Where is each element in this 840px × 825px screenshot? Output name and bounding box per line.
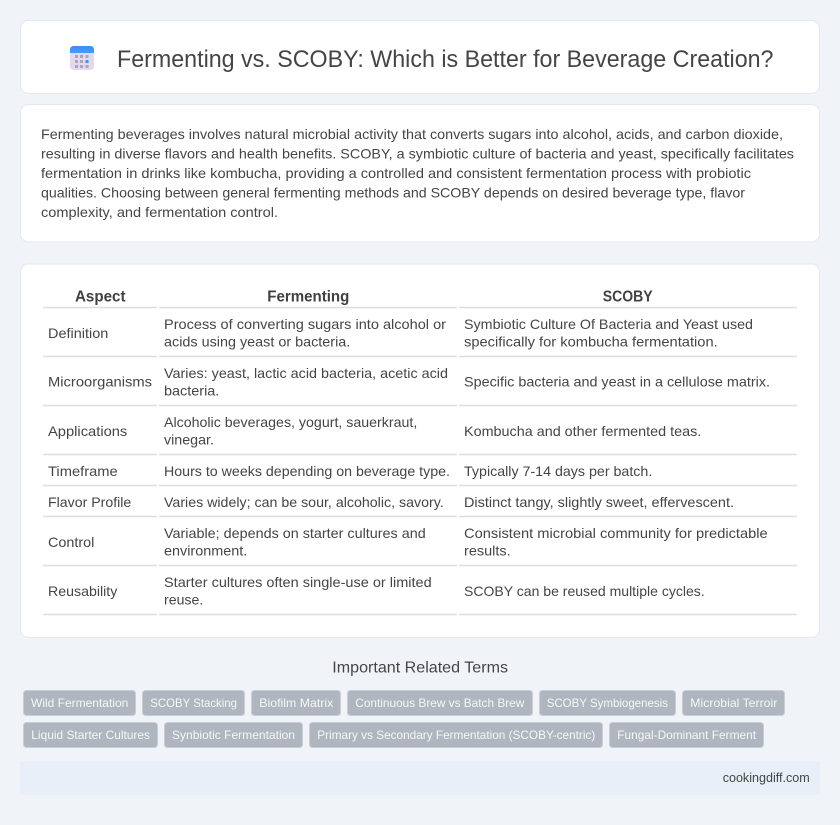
row: definition: Symbiotic Culture Of Bacteria and Yeast used [464, 316, 753, 332]
intro paragraph: resulting in diverse flavors and health benefits. SCOBY, a symbiotic culture of bacteria and yeast, specifically facilitates [41, 146, 794, 162]
row: flavor profile [43, 494, 797, 516]
row: reusability: Starter cultures often single-use or limited [164, 574, 432, 590]
intro paragraph: Fermenting beverages involves natural microbial activity that converts sugars into alcohol, acids, and carbon dioxide, [41, 126, 783, 142]
row: definition [43, 316, 797, 356]
row: microorganisms: Varies: yeast, lactic acid bacteria, acetic acid [164, 365, 448, 381]
row: timeframe [43, 463, 797, 486]
row: flavor profile: Distinct tangy, slightly sweet, effervescent. [464, 494, 734, 510]
tag: Wild Fermentation [31, 696, 128, 710]
tag: Continuous Brew vs Batch Brew [355, 696, 525, 710]
row: timeframe: Hours to weeks depending on beverage type. [164, 463, 450, 479]
tag [252, 690, 340, 716]
tag: Microbial Terroir [690, 696, 777, 710]
tag: Biofilm Matrix [259, 696, 333, 710]
icon: calendar [70, 46, 94, 70]
row: microorganisms: Microorganisms [48, 374, 152, 390]
row: microorganisms: Specific bacteria and yeast in a cellulose matrix. [464, 374, 770, 390]
row: applications [43, 414, 797, 454]
row: applications: Alcoholic beverages, yogurt, sauerkraut, [164, 414, 417, 430]
row: applications: Applications [48, 423, 127, 439]
tag: Liquid Starter Cultures [31, 728, 150, 742]
tag [142, 690, 244, 716]
row: microorganisms [43, 365, 797, 406]
row: timeframe: Typically 7-14 days per batch. [464, 463, 652, 479]
row: definition: acids using yeast or bacteria. [164, 334, 350, 350]
intro paragraph [41, 126, 794, 220]
table header row [43, 289, 797, 308]
row: definition: Process of converting sugars into alcohol or [164, 316, 446, 332]
row: applications: Kombucha and other fermented teas. [464, 423, 701, 439]
table header row: Aspect [75, 289, 126, 306]
tag [348, 690, 532, 716]
tag [610, 722, 764, 748]
row: reusability: Reusability [48, 583, 117, 599]
tag [24, 722, 158, 748]
intro paragraph: complexity, and fermentation control. [41, 204, 278, 220]
row: control: environment. [164, 543, 247, 559]
heading: related terms: Important Related Terms [332, 660, 508, 677]
intro paragraph: qualities. Choosing between general fermenting methods and SCOBY depends on desired beverage type, flavor [41, 185, 745, 201]
row: reusability: SCOBY can be reused multiple cycles. [464, 583, 705, 599]
panel: comparison table [20, 264, 820, 638]
row: control: results. [464, 543, 511, 559]
row: applications: vinegar. [164, 432, 214, 448]
panel: related term tags [24, 690, 784, 748]
table header row: Fermenting [267, 289, 349, 306]
row: control: Variable; depends on starter cultures and [164, 525, 426, 541]
tag: Synbiotic Fermentation [172, 728, 295, 742]
tag: SCOBY Symbiogenesis [547, 696, 668, 710]
intro paragraph: fermentation in drinks like kombucha, providing a controlled and consistent fermentation process with probiotic [41, 165, 751, 181]
row: flavor profile: Varies widely; can be sour, alcoholic, savory. [164, 494, 444, 510]
tag: SCOBY Stacking [150, 696, 237, 710]
title: Fermenting vs. SCOBY: Which is Better for Beverage Creation? [117, 46, 774, 73]
row: flavor profile: Flavor Profile [48, 494, 132, 510]
tag [540, 690, 676, 716]
table header row: SCOBY [603, 289, 653, 306]
tag: Fungal-Dominant Ferment [617, 728, 757, 742]
row: timeframe: Timeframe [48, 463, 118, 479]
tag: Primary vs Secondary Fermentation (SCOBY-centric) [317, 728, 595, 742]
panel: introduction text [20, 104, 820, 242]
row: reusability: reuse. [164, 592, 203, 608]
row: control [43, 525, 797, 566]
tag [310, 722, 602, 748]
row: control: Control [48, 534, 94, 550]
row: reusability [43, 574, 797, 614]
footer bar: cookingdiff.com [723, 770, 810, 785]
row: definition: Definition [48, 325, 108, 341]
tag [164, 722, 302, 748]
panel: title header [20, 20, 820, 94]
row: definition: specifically for kombucha fermentation. [464, 334, 718, 350]
row: microorganisms: bacteria. [164, 383, 219, 399]
row: control: Consistent microbial community for predictable [464, 525, 768, 541]
tag [682, 690, 784, 716]
tag [24, 690, 136, 716]
footer bar [20, 761, 820, 795]
